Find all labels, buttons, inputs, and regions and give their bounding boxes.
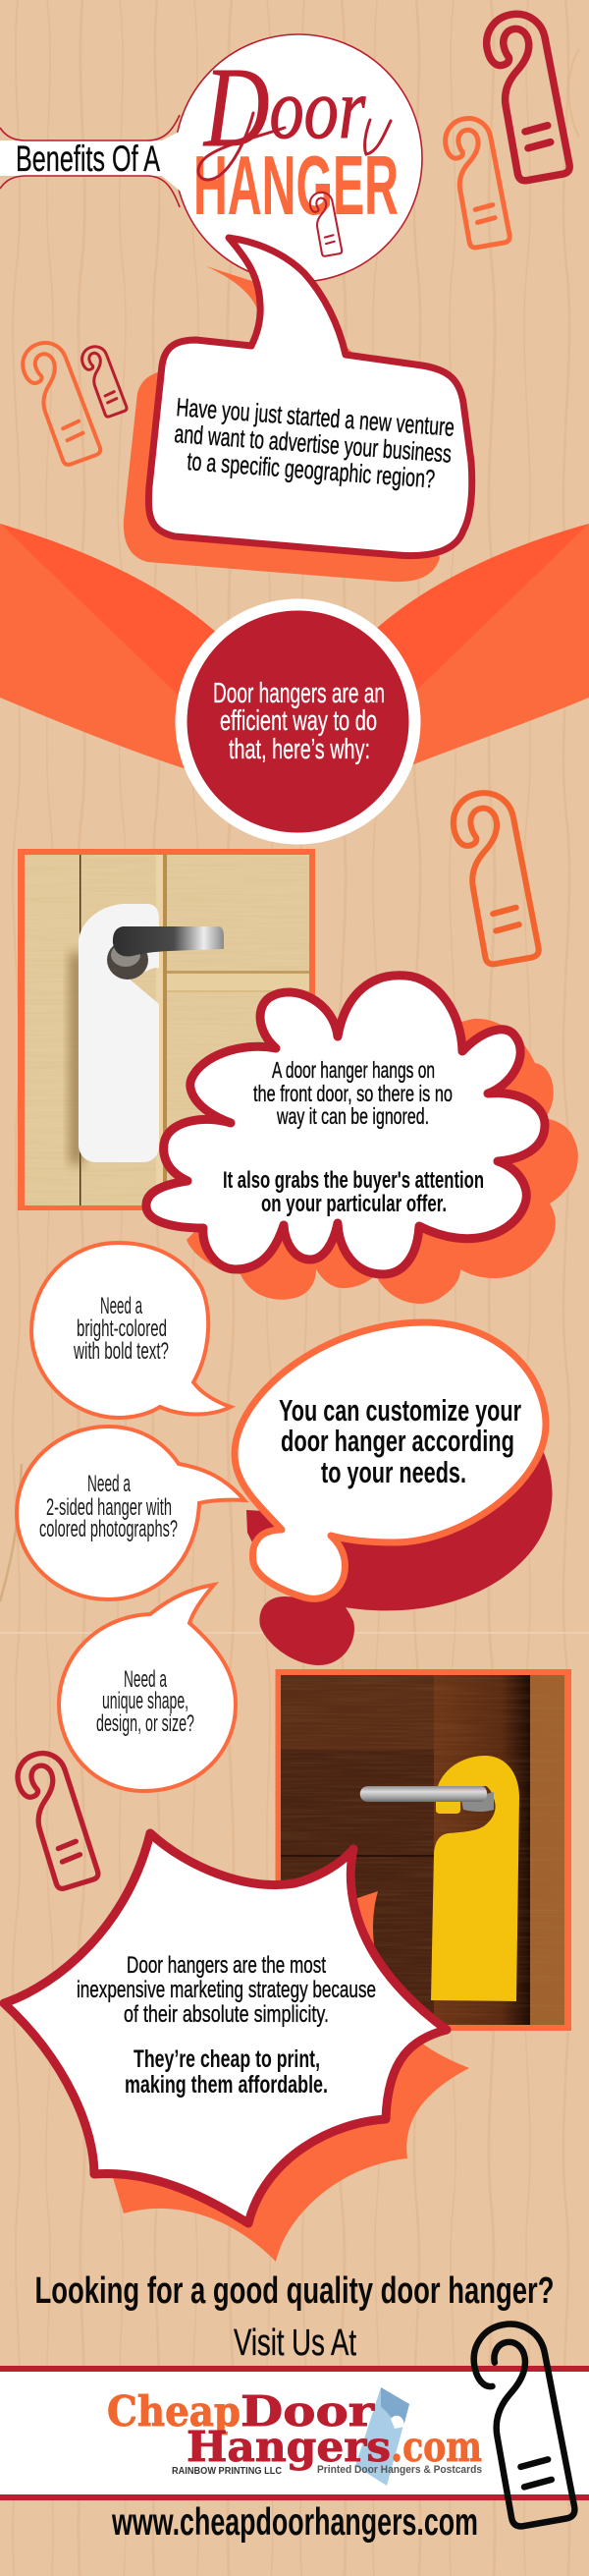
script swash (198, 113, 391, 180)
speech bubble: 2-sided: Need a (87, 1471, 131, 1497)
thought bubble body (235, 1322, 546, 1598)
cloud callout (146, 976, 578, 1304)
ribbon wing right (376, 524, 589, 765)
bubble text: to a specific geographic region? (187, 446, 436, 494)
cloud shadow (187, 1019, 578, 1304)
heading: Door: D (202, 44, 269, 170)
heading: HANGER: HANGER (193, 140, 399, 233)
photo: white door hanger on light door (18, 849, 315, 1210)
heading: Door: oor (269, 62, 366, 157)
logo wordmark: .com (391, 2423, 482, 2471)
burst text: Door hangers are the most (127, 1952, 326, 1979)
burst text: inexpensive marketing strategy because (77, 1977, 376, 2003)
cloud text: A door hanger hangs on (272, 1057, 435, 1083)
thought bubble text: to your needs. (321, 1455, 466, 1489)
cloud body (146, 976, 545, 1274)
logo wordmark (107, 2387, 482, 2477)
bubble text: and want to advertise your business (174, 419, 453, 469)
door lever (360, 1786, 494, 1812)
speech bubble: 2-sided: colored photographs? (39, 1516, 178, 1542)
burst text: They’re cheap to print, (134, 2045, 320, 2073)
icon: small hanger in badge (308, 191, 343, 257)
big thought bubble (235, 1322, 552, 1665)
logo wordmark: RAINBOW PRINTING LLC (172, 2466, 282, 2477)
logo wordmark: Cheap (107, 2387, 241, 2436)
photo: yellow door hanger on dark door (275, 1669, 571, 2031)
icon: small red hanger left (79, 343, 128, 419)
intro speech bubble (124, 238, 472, 582)
speech bubble: unique shape (59, 1585, 236, 1791)
red circle callout: that, here’s why: (229, 734, 370, 765)
red circle callout (175, 599, 420, 845)
cloud text: the front door, so there is no (253, 1081, 453, 1106)
red circle callout: efficient way to do (220, 705, 377, 737)
icon: orange hanger top right (442, 115, 510, 250)
speech bubble: 2-sided (17, 1427, 244, 1599)
logo wordmark: Hangers (187, 2423, 391, 2471)
thought bubble text (279, 1393, 521, 1489)
cloud text (223, 1057, 484, 1217)
bubble shadow (124, 266, 440, 582)
cloud text: It also grabs the buyer's attention (223, 1167, 484, 1194)
burst text: making them affordable. (125, 2071, 328, 2099)
speech bubble: bright-colored: bright-colored (77, 1316, 167, 1342)
cloud text: on your particular offer. (261, 1191, 447, 1217)
speech bubble: bright-colored (31, 1243, 231, 1418)
white hanger (79, 904, 159, 1162)
bubble body (148, 238, 472, 556)
icon: orange hanger left (17, 336, 102, 469)
red circle callout: Door hangers are an (213, 678, 385, 709)
heading: Benefits Of A: Benefits Of A (16, 139, 160, 179)
footer visit line: Visit Us At (234, 2323, 356, 2364)
cloud text: way it can be ignored. (276, 1103, 429, 1129)
logo band (0, 2366, 589, 2500)
thought bubble shadow (246, 1444, 552, 1665)
bubble text: Have you just started a new venture (176, 392, 455, 442)
icon: red hanger lower left (12, 1747, 99, 1892)
speech bubble: unique shape: Need a (124, 1666, 167, 1693)
burst shadow (32, 1891, 469, 2262)
burst text (77, 1952, 376, 2099)
bubble text (174, 392, 455, 494)
logo wordmark: Printed Door Hangers & Postcards (317, 2464, 482, 2476)
icon: black hanger (468, 2318, 576, 2530)
logo wordmark: Door (241, 2387, 375, 2436)
title badge (0, 34, 422, 282)
icon: large red hanger (482, 9, 570, 183)
burst text: of their absolute simplicity. (124, 2001, 329, 2028)
speech bubble: unique shape: unique shape, (102, 1688, 188, 1714)
burst body (4, 1833, 447, 2223)
speech bubble: bright-colored: Need a (100, 1293, 142, 1319)
speech bubble: 2-sided: 2-sided hanger with (46, 1494, 172, 1521)
logo graphic (355, 2387, 409, 2486)
door handle (107, 926, 224, 980)
speech bubble: bright-colored: with bold text? (73, 1338, 169, 1365)
speech bubble: unique shape: design, or size? (96, 1710, 194, 1737)
yellow hanger (431, 1756, 519, 2001)
ribbon wing left (0, 524, 218, 769)
icon: orange hanger right (449, 788, 540, 967)
burst callout (4, 1833, 469, 2262)
